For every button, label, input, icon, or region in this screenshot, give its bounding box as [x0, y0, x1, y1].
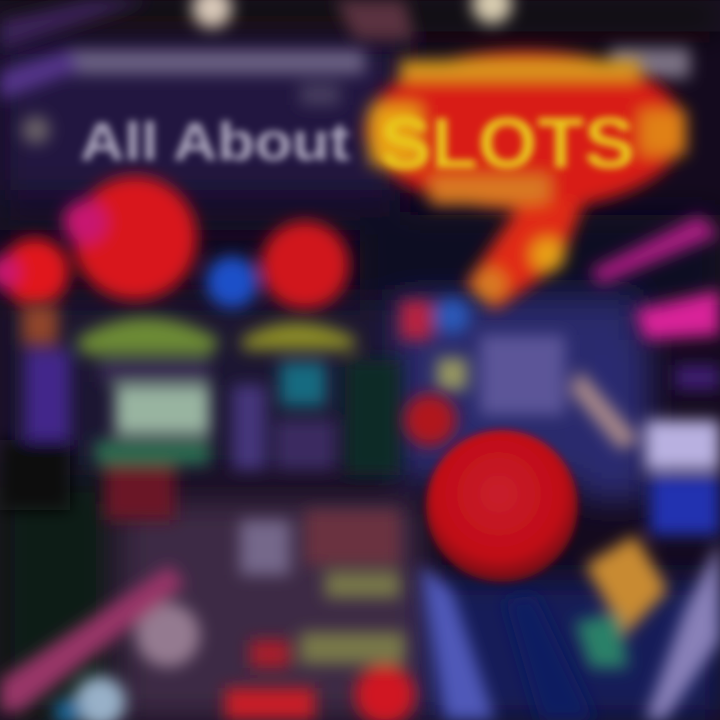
red lever ball: [404, 394, 578, 582]
lever stripes: [420, 540, 720, 720]
red balloons left: [0, 176, 349, 309]
marquee sign band: [0, 48, 690, 144]
speech bubble: [365, 50, 686, 310]
floor pattern: [0, 510, 415, 720]
slot machine centre: [232, 322, 400, 475]
bubble text: SLOTS: [380, 104, 635, 184]
heading text: All About: [80, 112, 350, 172]
right side stripes: [400, 215, 720, 668]
ceiling lights: [0, 0, 512, 50]
slot machine left: [0, 305, 220, 520]
